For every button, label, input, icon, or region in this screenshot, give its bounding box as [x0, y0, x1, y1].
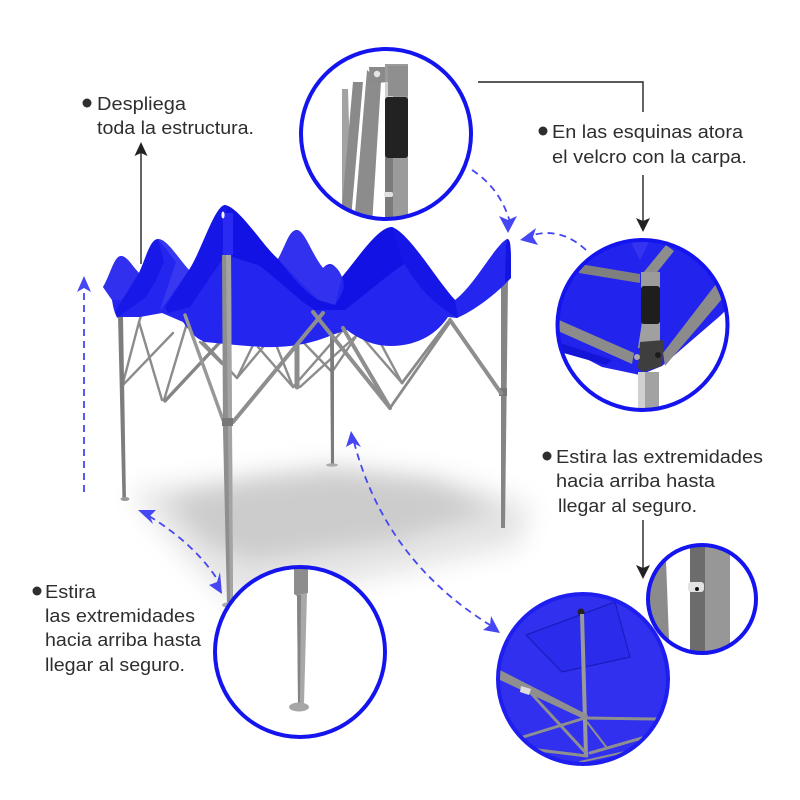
back peak highlight [278, 230, 342, 305]
pin [688, 582, 704, 592]
dashed arrow: raise vertical [77, 276, 91, 492]
left front flap [115, 239, 164, 318]
text: unfold structure: toda la estructura. [97, 117, 254, 138]
text: stretch limbs left: hacia arriba hasta [45, 629, 202, 650]
post [690, 545, 705, 653]
lower tube [297, 593, 307, 704]
dashed arrow: roof detail to tent [346, 431, 500, 633]
main front flap [225, 205, 411, 310]
velcro strap [641, 286, 660, 324]
foot plate [289, 702, 309, 712]
right flap [392, 227, 458, 318]
right pole [501, 280, 508, 528]
text: stretch limbs left: Estira [45, 581, 97, 602]
pole sleeve [223, 213, 233, 255]
text: velcro corners: el velcro con la carpa. [552, 146, 747, 167]
folded arms [342, 89, 349, 204]
arrow: callout down to pin detail [636, 520, 650, 579]
bracket [520, 686, 531, 695]
detail circle: velcro on post [301, 49, 471, 225]
arrow: up to heading [134, 142, 148, 264]
back truss [200, 330, 402, 387]
front truss and pole [185, 255, 501, 608]
blue underside [560, 242, 724, 375]
detail circle: corner from below [556, 238, 730, 412]
dashed arrow: right detail to corner [520, 228, 586, 250]
bracket [369, 67, 385, 83]
text: stretch limbs right: hacia arriba hasta [556, 470, 716, 491]
dashed arrow: foot detail to front pole [138, 510, 222, 594]
text: velcro corners [538, 121, 747, 167]
centre pole [580, 614, 588, 756]
roof seams [526, 602, 630, 672]
main peak left flap [165, 205, 225, 313]
text: stretch limbs right: Estira las extremidades [556, 446, 763, 467]
velcro strap [385, 97, 408, 158]
text: unfold structure: Despliega [97, 93, 187, 114]
back poles [294, 345, 300, 387]
blue canopy [103, 205, 511, 347]
left truss [123, 297, 190, 400]
frame bars [558, 320, 634, 364]
pin [384, 192, 393, 197]
ground shadow [130, 464, 530, 605]
dashed arrow: top detail to corner [472, 170, 517, 233]
left pole [118, 316, 126, 500]
detail circle: foot plate [215, 565, 385, 737]
detail circle: locking pin [648, 545, 756, 653]
post [645, 372, 659, 408]
text: stretch limbs right: llegar al seguro. [558, 495, 697, 516]
text: stretch limbs left: llegar al seguro. [45, 654, 185, 675]
canopy body [103, 205, 511, 347]
side tube [650, 562, 669, 639]
text: stretch limbs right [542, 446, 763, 516]
detail circle: roof underside [498, 594, 668, 764]
text: velcro corners: En las esquinas atora [552, 121, 744, 142]
right peak shade [505, 239, 511, 282]
upper tube [294, 569, 308, 596]
post [385, 64, 408, 225]
text: stretch limbs left: las extremidades [45, 605, 195, 626]
text: stretch limbs left [32, 581, 202, 675]
text: unfold structure [82, 93, 254, 138]
centre hub [578, 608, 584, 616]
left peaks highlight [158, 239, 189, 310]
thick roof bar [498, 669, 588, 720]
hinge [638, 340, 664, 372]
arrow: callout down to corner detail [478, 82, 650, 232]
bars [523, 690, 657, 762]
tent frame [118, 280, 508, 528]
